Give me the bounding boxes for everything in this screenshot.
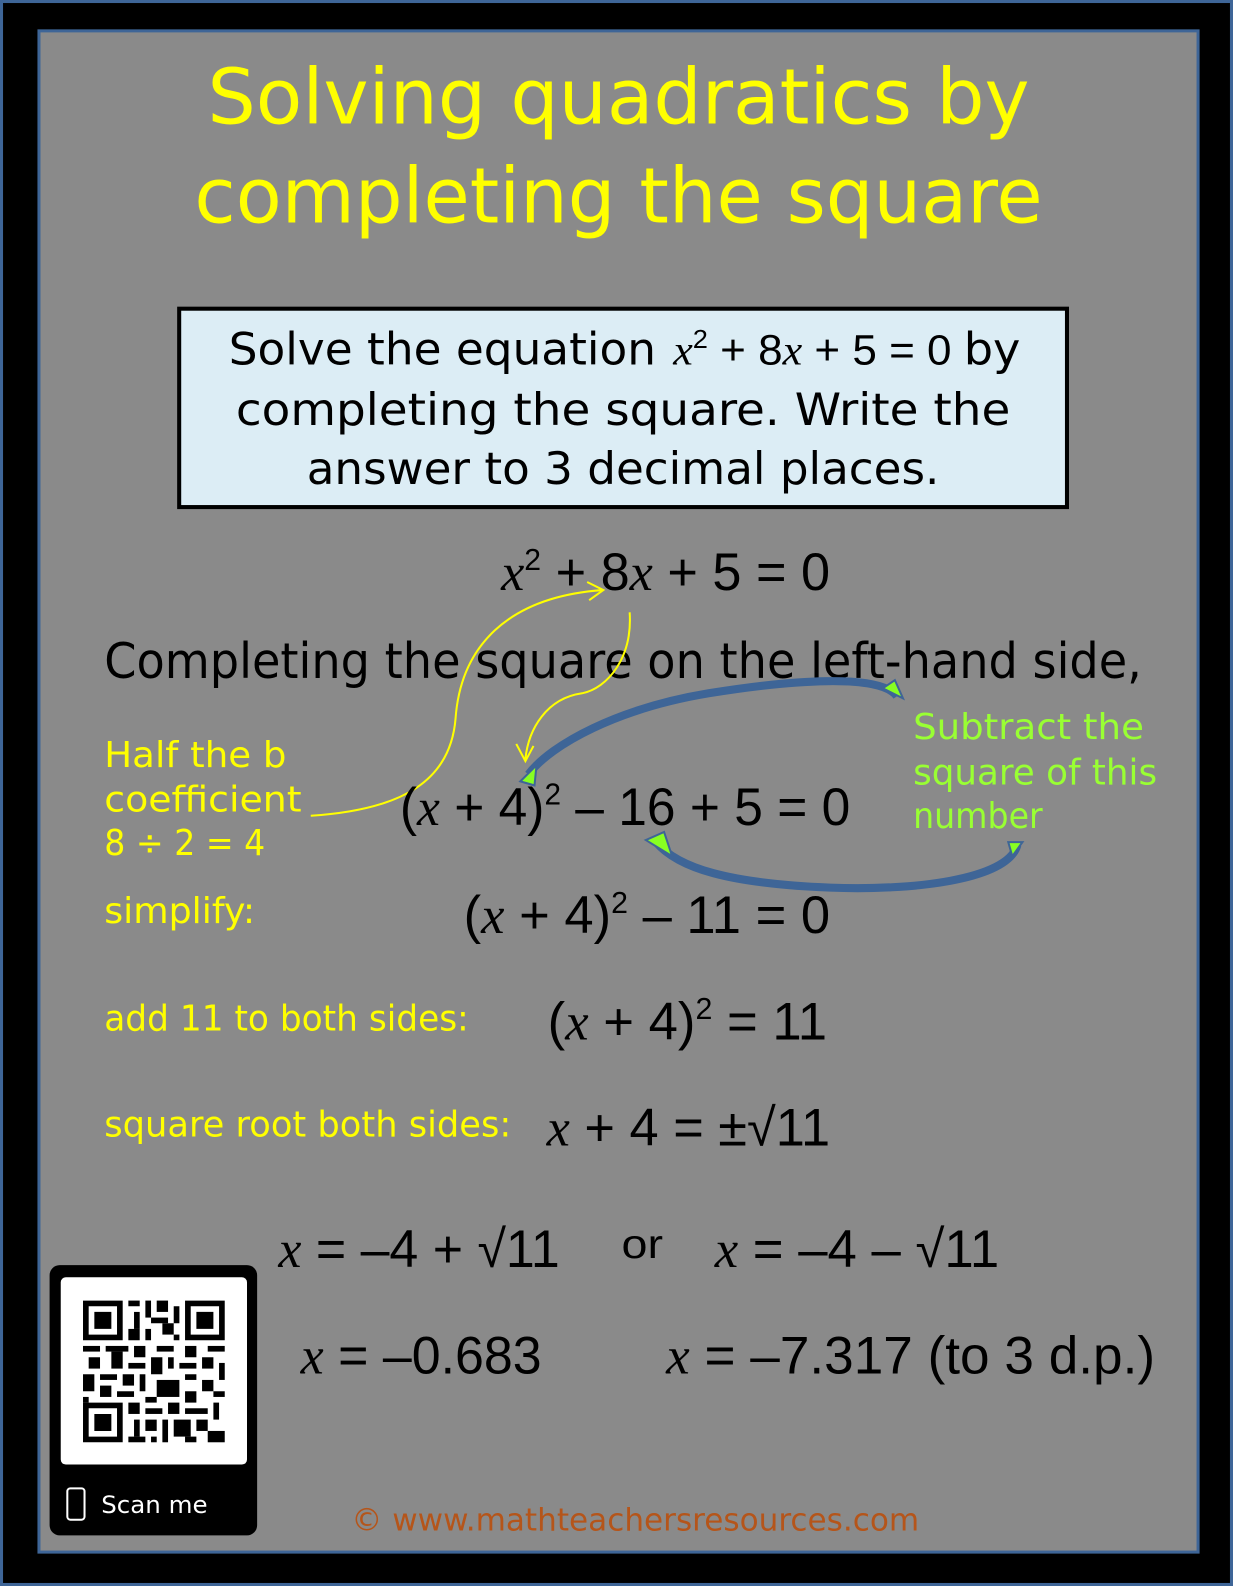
question box: answer to 3 decimal places. [307,443,939,495]
title: Solving quadratics by [208,53,1030,142]
solutions decimal: x = –0.683 [300,1326,542,1385]
equation 1: + 8 [541,543,630,602]
question box: completing the square. Write the [236,384,1010,436]
arrow: blue curved to 16 [646,832,1022,888]
question box: 2 [693,324,708,354]
question box: + 8 [708,327,783,374]
step: simplify: simplify: [104,891,255,932]
label: half the b coefficient: Half the b [104,735,286,776]
label: subtract the square: Subtract the [913,707,1144,748]
question box: Solve the equation [229,323,656,375]
equation 2: – 16 + 5 = 0 [561,778,850,837]
step: simplify: (x + 4) [464,886,611,945]
question box: x + 5 = 0 [783,327,946,374]
QR panel: Scan me [101,1490,208,1519]
step: square root: x + 4 = ±√11 [546,1099,830,1158]
question box: by [964,323,1020,375]
label: half the b coefficient: coefficient [104,780,302,821]
solutions exact: x = –4 – √11 [714,1220,999,1279]
solutions exact: or [622,1221,663,1267]
label: subtract the square: number [913,796,1043,837]
solutions decimal: x = –7.317 (to 3 d.p.) [665,1326,1155,1385]
step: add 11: 2 [695,993,712,1026]
label: half the b coefficient: 8 ÷ 2 = 4 [104,823,265,864]
label: half the b coefficient [104,735,302,864]
QR code [83,1301,225,1442]
arrow: blue curved from label to 4 [520,680,903,785]
arrow: yellow from label to 8 [311,582,603,816]
sentence: completing the square: Completing the square on the left-hand side, [104,634,1142,690]
equation 2: 2 [544,779,561,812]
step: square root [104,1099,830,1158]
solutions exact [277,1220,999,1279]
icon: phone [67,1488,85,1520]
step: simplify [104,886,830,945]
step: add 11: add 11 to both sides: [104,998,469,1039]
step: add 11: (x + 4) [548,992,695,1051]
step: simplify: – 11 = 0 [628,886,830,945]
equation 1: 2 [524,544,541,577]
equation 1: x [500,544,524,602]
label: subtract the square [913,707,1157,837]
QR panel [50,1265,257,1535]
label: subtract the square: square of this [913,752,1157,793]
title: completing the square [194,153,1043,242]
step: simplify: 2 [611,887,628,920]
equation 2: (x + 4) [400,778,547,837]
step: add 11: = 11 [712,992,827,1051]
equation 1: x + 5 = 0 [630,543,831,602]
title [194,53,1043,242]
solutions exact: x = –4 + √11 [277,1220,560,1279]
question box [179,309,1067,507]
step: square root: square root both sides: [104,1105,511,1146]
step: add 11 [104,992,827,1051]
arrow: yellow from 8 down to 4 [516,612,630,761]
solutions decimal [300,1326,1155,1385]
footer copyright: © www.mathteachersresources.com [351,1502,919,1538]
question box: x [672,327,693,374]
